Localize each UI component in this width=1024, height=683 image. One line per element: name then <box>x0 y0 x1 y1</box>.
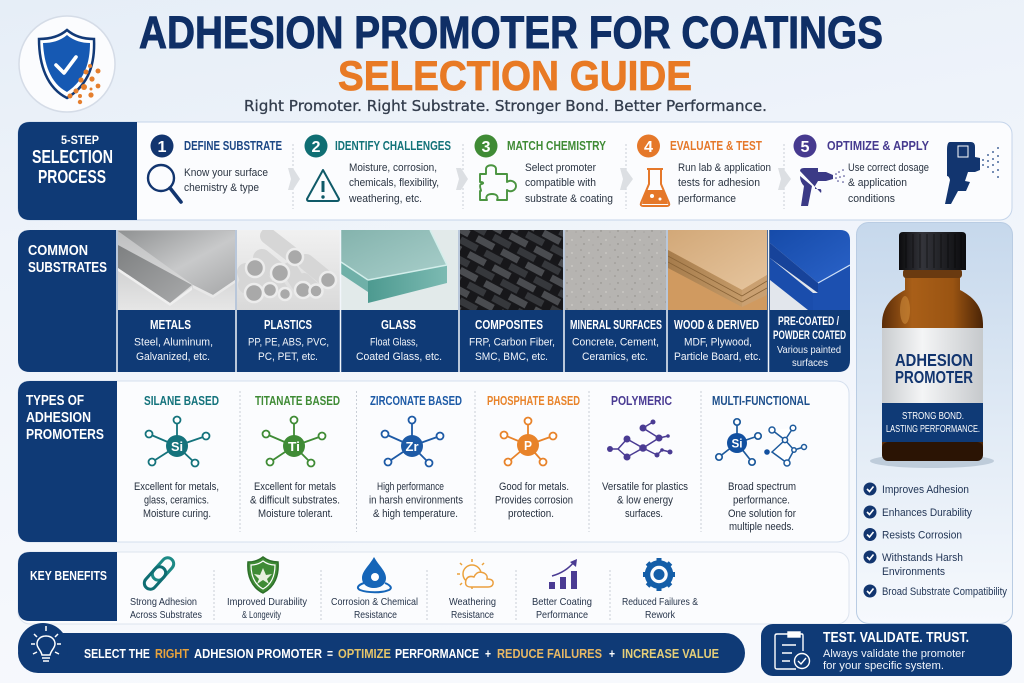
type: titanate based: TITANATE BASED <box>255 394 340 408</box>
benefit: improved durability: & Longevity <box>242 609 282 621</box>
step 2 identify challenges: 2 <box>312 139 321 156</box>
callout: test validate trust: for your specific system. <box>823 660 944 672</box>
advantage list: Withstands Harsh <box>882 552 963 564</box>
type: phosphate based: PHOSPHATE BASED <box>487 394 580 408</box>
benefit: strong adhesion: Across Substrates <box>130 609 202 621</box>
substrate: mineral surfaces: Ceramics, etc. <box>582 351 648 363</box>
product bottle: LASTING PERFORMANCE. <box>886 424 980 435</box>
panel heading: selection process: 5-STEP <box>61 133 99 147</box>
benefit: better coating performance: Better Coating <box>532 596 592 608</box>
step 2 identify challenges: chemicals, flexibility, <box>349 177 439 189</box>
substrate: metals: Steel, Aluminum, <box>134 336 213 348</box>
advantage list: Improves Adhesion <box>882 484 969 496</box>
type: phosphate based: protection. <box>508 508 554 520</box>
panel heading: selection process: PROCESS <box>38 167 106 187</box>
benefit: better coating performance <box>532 559 592 621</box>
step 5 optimize and apply: Use correct dosage <box>848 162 929 174</box>
type: polymeric: surfaces. <box>625 508 663 520</box>
type: polymeric: & low energy <box>617 494 673 506</box>
substrate: composites: FRP, Carbon Fiber, <box>469 336 555 348</box>
substrate: glass: GLASS <box>381 318 416 332</box>
panel heading: key benefits: KEY BENEFITS <box>30 568 107 583</box>
panel: types of adhesion promoters <box>18 381 849 542</box>
benefit: corrosion and chemical resistance <box>331 557 418 621</box>
benefit: weathering resistance: Weathering <box>449 596 496 608</box>
benefit: strong adhesion <box>130 555 202 621</box>
benefit: improved durability <box>227 557 308 621</box>
panel heading: common substrates: COMMON <box>28 243 88 259</box>
type: silane based: Excellent for metals, <box>134 481 219 493</box>
substrate: composites: SMC, BMC, etc. <box>475 351 548 363</box>
substrate: metals: Galvanized, etc. <box>136 351 210 363</box>
step 4 evaluate and test <box>637 134 771 206</box>
advantage list: Resists Corrosion <box>882 530 962 542</box>
type: multi-functional: One solution for <box>728 508 796 520</box>
substrate: plastics: PC, PET, etc. <box>258 351 318 363</box>
title: ADHESION PROMOTER FOR COATINGS <box>139 7 883 58</box>
type: polymeric <box>602 394 688 520</box>
substrate: plastics: PLASTICS <box>264 318 312 332</box>
panel: key benefits <box>18 552 849 624</box>
icon: clipboard with check <box>775 632 810 669</box>
type: titanate based: Ti <box>288 439 300 454</box>
step 3 match chemistry <box>474 134 613 205</box>
type: multi-functional: Broad spectrum <box>728 481 796 493</box>
step 3 match chemistry: compatible with <box>525 177 596 189</box>
benefit: weathering resistance: Resistance <box>451 609 494 621</box>
type: silane based <box>134 394 219 520</box>
substrate: mineral surfaces: MINERAL SURFACES <box>570 318 662 332</box>
substrate: glass: Coated Glass, etc. <box>356 351 442 363</box>
banner: select the right adhesion promoter: ADHESION PROMOTER <box>194 646 323 661</box>
type: multi-functional: MULTI-FUNCTIONAL <box>712 394 810 408</box>
step 2 identify challenges: weathering, etc. <box>348 193 422 205</box>
type: zirconate based: ZIRCONATE BASED <box>370 394 462 408</box>
type: silane based: Si <box>171 439 183 454</box>
panel heading: types of adhesion promoters <box>26 393 104 443</box>
substrate: pre-coated and powder coated <box>770 230 850 369</box>
panel: common substrates <box>18 230 850 372</box>
step 1 define substrate: chemistry & type <box>184 182 259 194</box>
product bottle: ADHESION <box>895 350 973 370</box>
type: polymeric: POLYMERIC <box>611 394 672 408</box>
substrate: plastics: PP, PE, ABS, PVC, <box>248 336 329 348</box>
panel heading: common substrates: SUBSTRATES <box>28 260 107 276</box>
type: multi-functional: Si <box>732 436 742 450</box>
logo badge: shield with particles <box>19 16 115 112</box>
type: zirconate based: & high temperature. <box>373 508 458 520</box>
step 3 match chemistry: 3 <box>482 139 491 156</box>
icon: light bulb <box>18 623 68 673</box>
benefit: strong adhesion: Strong Adhesion <box>130 596 197 608</box>
substrate: pre-coated and powder coated: PRE-COATED / <box>778 314 839 328</box>
panel heading: selection process: SELECTION <box>32 147 113 167</box>
panel heading: selection process <box>32 133 113 187</box>
type: multi-functional <box>712 394 810 533</box>
callout: test validate trust <box>761 624 1012 676</box>
substrate: glass <box>341 230 458 363</box>
banner: select the right adhesion promoter: INCREASE VALUE <box>622 646 719 661</box>
product bottle: STRONG BOND. <box>902 411 964 422</box>
type: multi-functional: performance. <box>733 494 790 506</box>
type: phosphate based: Provides corrosion <box>495 494 573 506</box>
icon: large spray gun <box>945 142 999 204</box>
step 5 optimize and apply: conditions <box>848 193 895 205</box>
benefit: reduced failures and rework: Rework <box>645 609 676 621</box>
title: SELECTION GUIDE <box>338 52 692 99</box>
step 4 evaluate and test: 4 <box>644 139 653 156</box>
benefit: reduced failures and rework: Reduced Failures & <box>622 596 698 608</box>
product bottle <box>870 232 994 468</box>
substrate: composites: COMPOSITES <box>475 318 543 332</box>
substrate: mineral surfaces: Concrete, Cement, <box>572 336 659 348</box>
substrate: wood and derived <box>668 230 767 363</box>
substrate: metals: METALS <box>150 318 191 332</box>
type: phosphate based <box>487 394 580 520</box>
advantage list: Broad Substrate Compatibility <box>882 586 1007 598</box>
banner: select the right adhesion promoter: = <box>327 646 333 661</box>
step 5 optimize and apply: 5 <box>800 139 810 156</box>
substrate: wood and derived: MDF, Plywood, <box>684 336 752 348</box>
substrate: mineral surfaces <box>565 230 666 363</box>
subtitle: Right Promoter. Right Substrate. Stronger Bond. Better Performance. <box>244 97 767 115</box>
step 3 match chemistry: substrate & coating <box>525 193 613 205</box>
type: titanate based: Moisture tolerant. <box>258 508 333 520</box>
callout: test validate trust: Always validate the promoter <box>823 648 965 660</box>
step 2 identify challenges: IDENTIFY CHALLENGES <box>335 139 451 153</box>
step 1 define substrate: DEFINE SUBSTRATE <box>184 139 282 153</box>
type: polymeric: Versatile for plastics <box>602 481 688 493</box>
step 1 define substrate <box>148 134 282 202</box>
step 1 define substrate: 1 <box>158 139 167 156</box>
substrate: composites <box>460 230 563 363</box>
type: silane based: Moisture curing. <box>143 508 211 520</box>
step 5 optimize and apply <box>794 134 930 206</box>
banner: select the right adhesion promoter: SELECT THE <box>84 646 150 661</box>
step 5 optimize and apply: & application <box>848 177 907 189</box>
step 4 evaluate and test: EVALUATE & TEST <box>670 139 762 153</box>
product bottle: PROMOTER <box>895 367 973 387</box>
type: phosphate based: Good for metals. <box>499 481 569 493</box>
panel heading: types of adhesion promoters: PROMOTERS <box>26 427 104 443</box>
step 2 identify challenges: Moisture, corrosion, <box>349 162 437 174</box>
substrate: pre-coated and powder coated: surfaces <box>792 357 828 369</box>
type: zirconate based: Zr <box>406 439 418 454</box>
type: phosphate based: P <box>524 438 532 453</box>
banner: select the right adhesion promoter: + <box>609 646 615 661</box>
banner: select the right adhesion promoter <box>18 623 745 673</box>
panel heading: common substrates <box>28 243 107 276</box>
benefit: corrosion and chemical resistance: Resistance <box>354 609 397 621</box>
type: silane based: glass, ceramics. <box>144 494 209 506</box>
advantage list: Enhances Durability <box>882 507 972 519</box>
substrate: pre-coated and powder coated: POWDER COATED <box>773 328 846 342</box>
benefit: reduced failures and rework <box>622 558 698 621</box>
banner: select the right adhesion promoter: REDUCE FAILURES <box>497 646 602 661</box>
type: silane based: SILANE BASED <box>144 394 219 408</box>
banner: select the right adhesion promoter: PERFORMANCE <box>395 646 479 661</box>
type: titanate based: & difficult substrates. <box>250 494 340 506</box>
substrate: pre-coated and powder coated: Various painted <box>777 344 841 356</box>
banner: select the right adhesion promoter: + <box>485 646 491 661</box>
panel heading: types of adhesion promoters: ADHESION <box>26 410 91 426</box>
substrate: wood and derived: Particle Board, etc. <box>674 351 761 363</box>
substrate: wood and derived: WOOD & DERIVED <box>674 318 759 332</box>
step 3 match chemistry: Select promoter <box>525 162 596 174</box>
panel heading: types of adhesion promoters: TYPES OF <box>26 393 84 409</box>
substrate: metals <box>118 230 235 363</box>
step 4 evaluate and test: performance <box>678 193 736 205</box>
substrate: plastics <box>237 230 340 363</box>
title <box>139 7 883 99</box>
banner: select the right adhesion promoter: OPTIMIZE <box>338 646 391 661</box>
step 4 evaluate and test: tests for adhesion <box>678 177 760 189</box>
step 3 match chemistry: MATCH CHEMISTRY <box>507 139 607 153</box>
benefit: weathering resistance <box>449 559 496 621</box>
substrate: glass: Float Glass, <box>370 336 418 348</box>
step 1 define substrate: Know your surface <box>184 167 268 179</box>
step 4 evaluate and test: Run lab & application <box>678 162 771 174</box>
step 5 optimize and apply: OPTIMIZE & APPLY <box>827 139 930 153</box>
type: titanate based <box>250 394 340 520</box>
type: zirconate based: High performance <box>377 481 444 493</box>
type: multi-functional: multiple needs. <box>729 521 794 533</box>
callout: test validate trust: TEST. VALIDATE. TRUST. <box>823 630 969 646</box>
advantage list <box>864 482 1007 598</box>
benefit: better coating performance: Performance <box>536 609 588 621</box>
type: zirconate based: in harsh environments <box>369 494 463 506</box>
panel: product bottle and advantages <box>856 222 1012 624</box>
panel: 5-step selection process <box>18 122 1012 220</box>
type: zirconate based <box>369 394 463 520</box>
type: titanate based: Excellent for metals <box>254 481 336 493</box>
banner: select the right adhesion promoter: RIGHT <box>155 646 189 661</box>
benefit: corrosion and chemical resistance: Corrosion & Chemical <box>331 596 418 608</box>
benefit: improved durability: Improved Durability <box>227 596 308 608</box>
advantage list: Environments <box>882 566 945 578</box>
step 2 identify challenges <box>304 134 451 205</box>
